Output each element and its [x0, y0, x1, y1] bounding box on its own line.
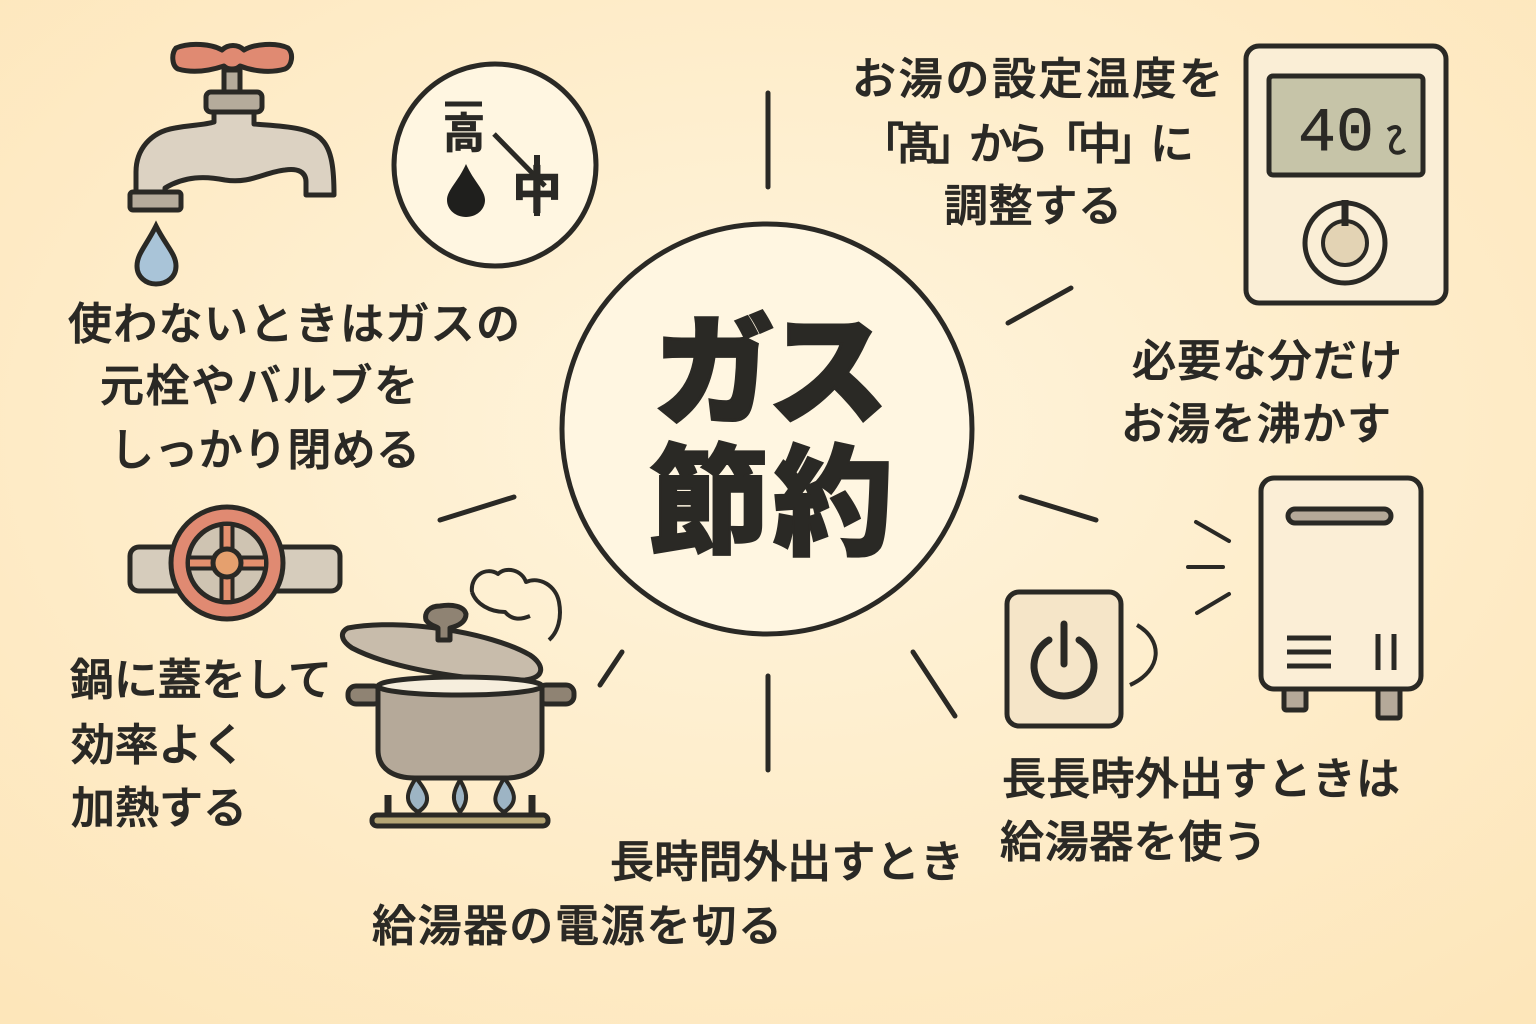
icon: water drop	[137, 226, 176, 284]
text: turn off main valve: しっかり閉める	[110, 426, 420, 475]
icon: power switch	[1007, 592, 1156, 726]
signal lines	[1188, 522, 1229, 613]
text: boil only what is needed: お湯を沸かす	[1121, 400, 1391, 449]
central circle title: 節約	[649, 437, 893, 571]
central circle title	[562, 224, 972, 634]
text: adjust temperature: 調整する	[944, 182, 1122, 231]
icon: high to medium dial: 中	[512, 163, 562, 219]
text: turn off main valve: 使わないときはガスの	[68, 300, 520, 349]
text: use water heater when out: 給湯器を使う	[1000, 818, 1267, 867]
text: adjust temperature	[852, 55, 1223, 231]
text: turn off power when leaving	[372, 838, 964, 951]
text: turn off main valve: 元栓やバルブを	[100, 362, 418, 411]
text: boil only what is needed	[1121, 337, 1402, 449]
text: use lid: 鍋に蓋をして	[70, 656, 332, 705]
text: boil only what is needed: 必要な分だけ	[1132, 337, 1402, 386]
radiating lines	[440, 93, 1096, 770]
icon: high to medium dial: 高	[443, 110, 485, 157]
text: adjust temperature: 「髙」から「中」に	[860, 120, 1194, 169]
icon: valve	[130, 507, 340, 619]
text: use lid: 加熱する	[71, 784, 247, 833]
text: turn off power when leaving: 給湯器の電源を切る	[372, 902, 782, 951]
text: use water heater when out: 長長時外出すときは	[1002, 755, 1400, 804]
icon: thermostat panel: 40	[1298, 98, 1374, 169]
icon: water heater	[1261, 478, 1421, 718]
icon: steam	[472, 570, 560, 640]
central circle title: ガス	[654, 306, 888, 440]
text: use lid	[70, 656, 332, 833]
text: turn off main valve	[68, 300, 520, 475]
text: adjust temperature: お湯の設定温度を	[852, 55, 1223, 104]
icon: pot on burner	[342, 570, 574, 826]
text: use water heater when out	[1000, 755, 1400, 867]
text: use lid: 効率よく	[71, 721, 246, 770]
icon: high to medium dial	[394, 64, 596, 266]
icon: thermostat panel	[1246, 46, 1446, 303]
icon: faucet	[130, 44, 334, 210]
text: turn off power when leaving: 長時問外出すとき	[610, 838, 964, 887]
